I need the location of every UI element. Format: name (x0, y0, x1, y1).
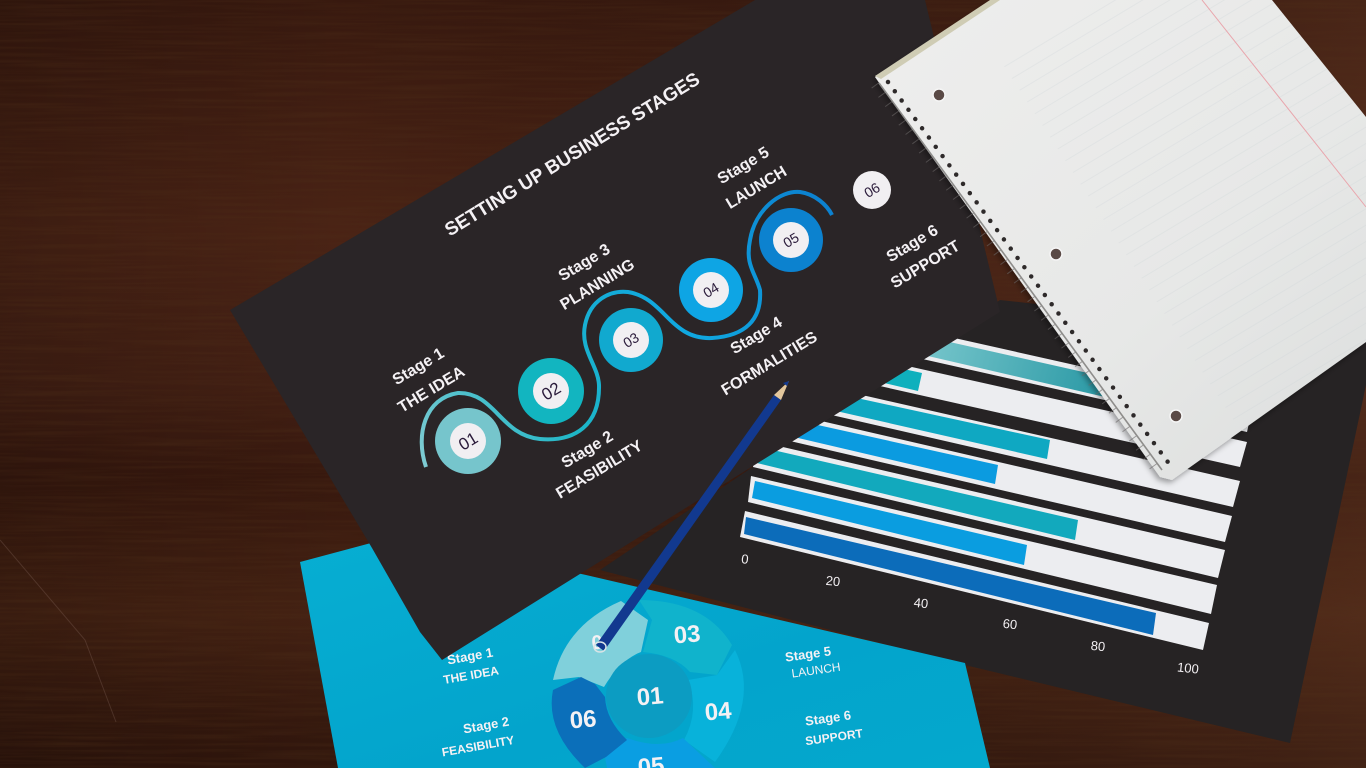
bar tracks (740, 300, 1253, 650)
axis numbers: 0 (741, 551, 749, 567)
donut chart segments: 04 (704, 697, 733, 727)
stage 6 marker: 06 (861, 179, 883, 201)
bar chart (740, 300, 1253, 677)
blue sheet stage labels (441, 643, 864, 759)
stage labels: SUPPORT (888, 238, 963, 292)
stage labels: Stage 4 (728, 314, 785, 358)
panel: black stages sheet (230, 0, 1000, 660)
axis numbers: 100 (1176, 659, 1200, 677)
blue sheet stage labels: Stage 2 (462, 714, 510, 736)
stage 6 marker (853, 171, 891, 209)
title: SETTING UP BUSINESS STAGES (441, 69, 704, 241)
stage 2 marker (518, 358, 584, 424)
stage labels: FORMALITIES (719, 329, 821, 399)
stage labels: Stage 3 (556, 241, 613, 285)
stage 2 marker: 02 (538, 378, 564, 404)
donut chart segments: 0 (591, 632, 604, 654)
donut chart segments: 03 (673, 620, 702, 650)
stage labels: Stage 2 (559, 428, 616, 472)
axis numbers: 80 (1090, 638, 1106, 654)
stage labels: LAUNCH (723, 163, 790, 213)
axis numbers: 40 (913, 595, 929, 611)
stage labels: Stage 5 (715, 144, 772, 188)
donut chart segments: 06 (569, 705, 598, 735)
icon: blue pencil (594, 381, 789, 652)
stage 3 marker (599, 308, 663, 372)
stage 5 marker (759, 208, 823, 272)
red margin line (1202, 0, 1366, 207)
ruled lines (1004, 0, 1363, 184)
spiral binding (875, 82, 1173, 470)
panel: black chart sheet (600, 300, 1366, 743)
axis numbers: 60 (1002, 616, 1018, 632)
stage labels: Stage 1 (390, 345, 447, 389)
winding path (422, 192, 832, 467)
donut chart segments: 01 (636, 682, 665, 712)
stage 5 marker: 05 (780, 229, 802, 251)
panel: spiral notebook (872, 0, 1366, 486)
stage 1 marker (435, 408, 501, 474)
stage 1 marker: 01 (455, 428, 481, 454)
axis numbers (741, 551, 1200, 677)
panel: blue sheet (300, 543, 990, 768)
stage labels: THE IDEA (395, 363, 468, 416)
blue sheet stage labels: SUPPORT (804, 726, 864, 748)
stage labels (390, 144, 963, 502)
stage 3 marker: 03 (620, 329, 642, 351)
blue sheet stage labels: LAUNCH (791, 660, 841, 681)
punched holes (933, 89, 1182, 422)
stage labels: PLANNING (557, 256, 638, 314)
blue sheet stage labels: Stage 6 (804, 707, 852, 729)
axis numbers: 20 (825, 573, 841, 589)
stage 4 marker (679, 258, 743, 322)
blue sheet stage labels: Stage 5 (784, 643, 832, 665)
stage labels: FEASIBILITY (553, 437, 646, 502)
blue sheet stage labels: FEASIBILITY (441, 733, 515, 759)
blue sheet stage labels: Stage 1 (446, 645, 494, 667)
stage labels: Stage 6 (884, 222, 941, 266)
stage 4 marker: 04 (700, 279, 722, 301)
bar fills (744, 306, 1156, 635)
blue sheet stage labels: THE IDEA (442, 663, 500, 687)
donut chart segments (552, 600, 744, 768)
